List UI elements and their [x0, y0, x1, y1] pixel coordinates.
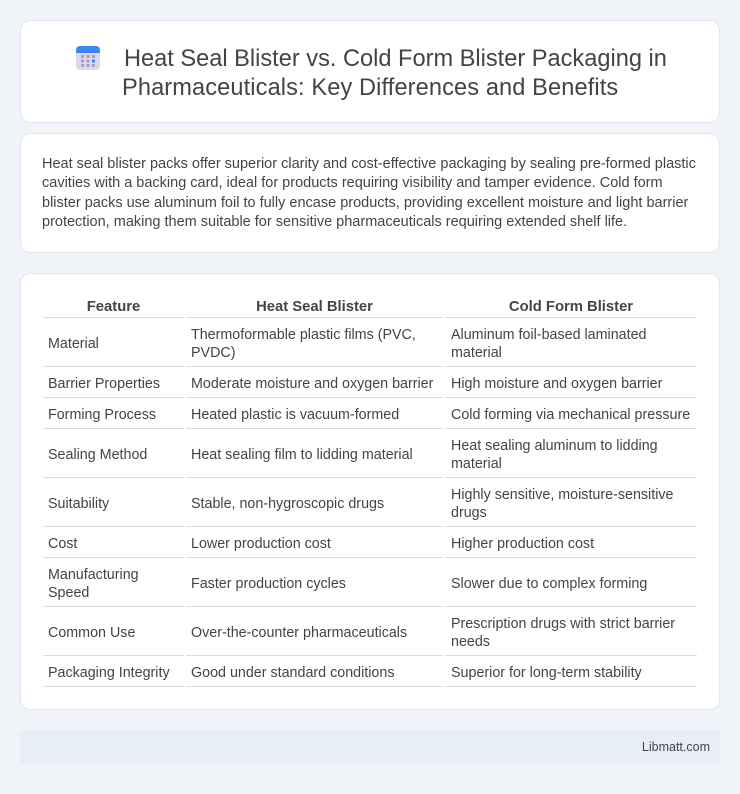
- table header row: Feature: [87, 299, 140, 315]
- row: material: Thermoformable plastic films (PVC,: [191, 327, 416, 343]
- row: packaging integrity: Superior for long-term stability: [451, 665, 642, 681]
- row: suitability: [48, 487, 673, 521]
- row: common use: [48, 616, 675, 650]
- intro paragraph: cavities with a backing card, ideal for products requiring visibility and tamper evidence. Cold form: [42, 175, 663, 191]
- intro paragraph: [42, 156, 696, 230]
- row: suitability: Highly sensitive, moisture-sensitive: [451, 487, 673, 503]
- row: cost: Cost: [48, 536, 77, 552]
- row: sealing method: Heat sealing film to lidding material: [191, 447, 413, 463]
- heading: Heat Seal Blister vs. Cold Form Blister Packaging in: [124, 46, 667, 72]
- row: barrier properties: [48, 376, 662, 392]
- footer credit: Libmatt.com: [642, 740, 710, 754]
- panel: introduction text: [20, 133, 720, 253]
- row: suitability: Suitability: [48, 496, 109, 512]
- row: sealing method: Sealing Method: [48, 447, 147, 463]
- row: forming process: Forming Process: [48, 407, 156, 423]
- row: forming process: Heated plastic is vacuum-formed: [191, 407, 399, 423]
- row: sealing method: Heat sealing aluminum to lidding: [451, 438, 658, 454]
- row: manufacturing speed: Speed: [48, 585, 89, 601]
- row: packaging integrity: Good under standard conditions: [191, 665, 394, 681]
- row: material: PVDC): [191, 345, 235, 361]
- row: barrier properties: Barrier Properties: [48, 376, 160, 392]
- row: packaging integrity: Packaging Integrity: [48, 665, 170, 681]
- row: common use: Prescription drugs with strict barrier: [451, 616, 675, 632]
- row: barrier properties: High moisture and oxygen barrier: [451, 376, 662, 392]
- row: suitability: drugs: [451, 505, 487, 521]
- row: suitability: Stable, non-hygroscopic drugs: [191, 496, 384, 512]
- row: manufacturing speed: [48, 567, 647, 601]
- intro paragraph: Heat seal blister packs offer superior clarity and cost-effective packaging by sealing pre-formed plastic: [42, 156, 696, 172]
- row: manufacturing speed: Faster production cycles: [191, 576, 346, 592]
- row: cost: Higher production cost: [451, 536, 594, 552]
- row: sealing method: material: [451, 456, 502, 472]
- row: manufacturing speed: Manufacturing: [48, 567, 139, 583]
- table header row: Cold Form Blister: [509, 299, 633, 315]
- icon: calendar blister: [76, 46, 100, 70]
- row: forming process: Cold forming via mechanical pressure: [451, 407, 690, 423]
- table header row: Heat Seal Blister: [256, 299, 373, 315]
- table header row: [87, 299, 633, 315]
- row: common use: needs: [451, 634, 490, 650]
- row: forming process: [48, 407, 690, 423]
- row: cost: Lower production cost: [191, 536, 331, 552]
- row: material: [48, 327, 646, 361]
- intro paragraph: blister packs use aluminum foil to fully encase products, providing excellent moisture and light barrier: [42, 195, 688, 211]
- row: sealing method: [48, 438, 658, 472]
- row: common use: Over-the-counter pharmaceuticals: [191, 625, 407, 641]
- row: material: material: [451, 345, 502, 361]
- heading: Pharmaceuticals: Key Differences and Benefits: [122, 75, 618, 101]
- panel: title header: [20, 20, 720, 123]
- row: material: Aluminum foil-based laminated: [451, 327, 646, 343]
- row: material: Material: [48, 336, 99, 352]
- intro paragraph: protection, making them suitable for sensitive pharmaceuticals requiring extended shelf life.: [42, 214, 627, 230]
- heading: [122, 46, 667, 101]
- row: barrier properties: Moderate moisture and oxygen barrier: [191, 376, 433, 392]
- row: common use: Common Use: [48, 625, 135, 641]
- footer bar: [20, 730, 720, 764]
- row: cost: [48, 536, 594, 552]
- panel: comparison table: [20, 273, 720, 710]
- row: manufacturing speed: Slower due to complex forming: [451, 576, 647, 592]
- row: packaging integrity: [48, 665, 642, 681]
